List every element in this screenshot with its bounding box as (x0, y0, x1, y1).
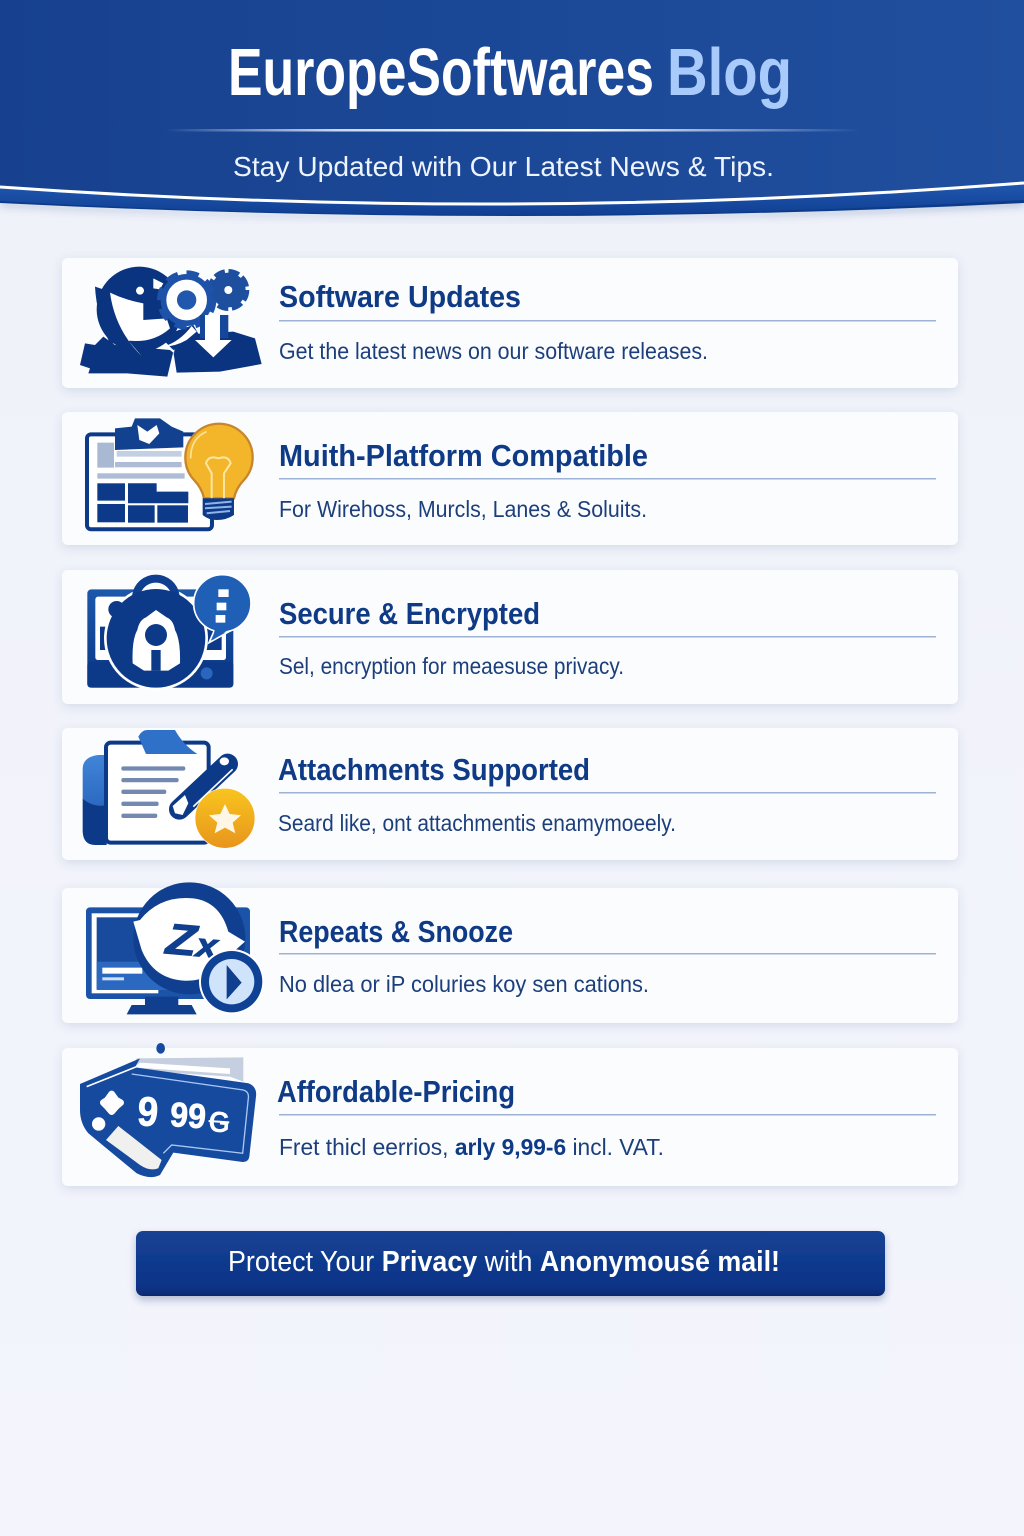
description: Fret thicl eerrios, arly 9,99-6 incl. VAT. (279, 1134, 664, 1160)
panel: secure and encrypted (62, 570, 958, 704)
panel: software updates (62, 258, 958, 388)
panel: multi-platform (62, 412, 958, 545)
title: Blog (667, 35, 792, 110)
heading: Attachments Supported (278, 752, 590, 787)
heading: Software Updates (279, 279, 521, 314)
description: No dlea or iP coluries koy sen cations. (279, 971, 649, 997)
panel: repeats and snooze (62, 882, 958, 1023)
panel: affordable pricing (62, 1043, 958, 1186)
panel: attachments supported (62, 728, 958, 860)
description: For Wirehoss, Murcls, Lanes & Soluits. (279, 496, 647, 522)
icon: price tag: 99 (169, 1096, 207, 1136)
icon: monitor, snooze clock and play button (86, 882, 264, 1014)
heading: Affordable-Pricing (277, 1074, 515, 1109)
icon: padlock and speech bubble (87, 575, 251, 690)
icon: price tag (80, 1043, 256, 1177)
icon: person and gears (80, 267, 262, 377)
heading: Repeats & Snooze (279, 914, 513, 949)
icon: monitor, snooze clock and play button: Zx (162, 915, 221, 968)
icon: price tag: G (207, 1105, 231, 1140)
call to action button (136, 1231, 885, 1296)
icon: calendar and light bulb (87, 418, 253, 529)
header banner (0, 0, 1024, 216)
button label: Protect Your Privacy with Anonymousé mail! (228, 1246, 780, 1278)
heading: Secure & Encrypted (279, 596, 540, 631)
description: Seard like, ont attachmentis enamymoeely. (278, 810, 676, 836)
title: EuropeSoftwares (228, 35, 654, 110)
description: Get the latest news on our software releases. (279, 338, 708, 364)
icon: price tag: 9 (136, 1088, 160, 1135)
icon: document, paperclip and star coin (83, 730, 255, 848)
heading: Muith-Platform Compatible (279, 438, 648, 473)
subtitle: Stay Updated with Our Latest News & Tips. (233, 151, 774, 182)
description: Sel, encryption for meaesuse privacy. (279, 653, 624, 679)
